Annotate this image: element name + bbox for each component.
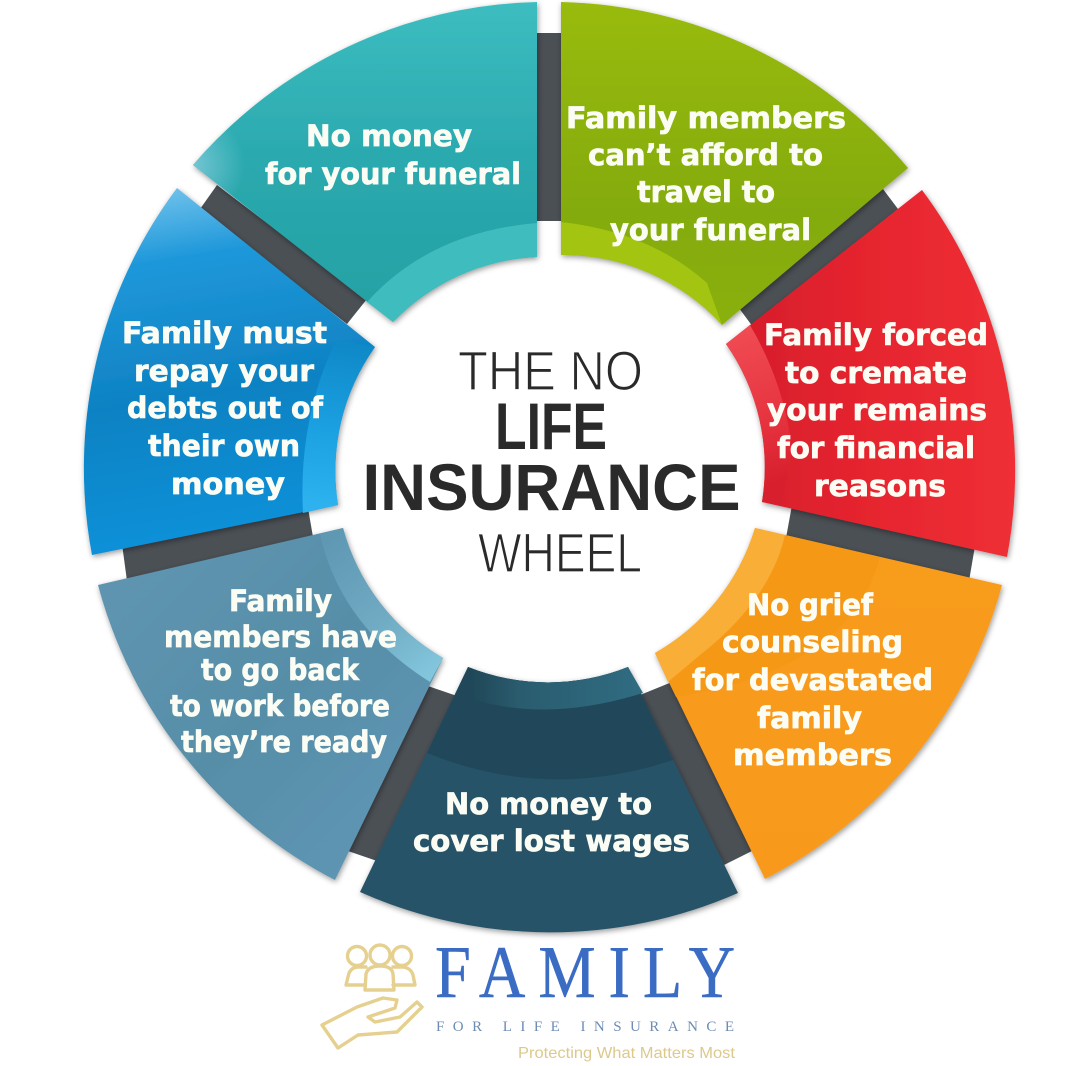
segment: family can't afford to travel: your funeral [610,213,811,247]
segment: repay debts [84,188,375,555]
center title [362,339,740,584]
segment: repay debts: repay your [134,354,315,388]
segment: forced to cremate: to cremate [785,356,967,390]
gray connectors between segments [122,33,975,866]
segment: repay debts: money [171,467,285,501]
segment: repay debts: debts out of [127,391,323,425]
segment: back to work before ready: they’re ready [181,725,387,759]
logo icon: family in hand [322,945,422,1048]
segment: no grief counseling: counseling [722,625,903,659]
segment: back to work before ready: Family [229,584,332,618]
segment: no money for your funeral: No money [306,119,472,153]
segment: no money for your funeral [193,2,537,322]
center title: THE NO [458,339,643,402]
segment: repay debts: Family must [122,316,327,350]
segment: back to work before ready: to work before [170,689,390,723]
segment: no grief counseling [655,528,1002,879]
segment: repay debts: their own [148,429,300,463]
logo subtitle: for life insurance: FOR LIFE INSURANCE [436,1019,734,1035]
segment: forced to cremate: Family forced [764,318,988,352]
center title: LIFE [495,389,607,463]
segment: no grief counseling: family [757,701,862,735]
logo wordmark: family: FAMILY [435,932,735,1014]
segment: back to work before ready: members have [164,620,397,654]
segment: family can't afford to travel: travel to [637,175,775,209]
segment: forced to cremate: reasons [814,469,946,503]
segment: no money to cover lost wages: No money to [445,787,652,821]
segment: back to work before ready [98,528,443,880]
segment: forced to cremate: for financial [777,431,975,465]
segment: no grief counseling: members [733,738,892,772]
logo tagline: Protecting What Matters Most [518,1045,736,1062]
segment: no money to cover lost wages [360,667,738,932]
segment: family can't afford to travel: can’t afford to [588,138,823,172]
segment: family can't afford to travel: Family members [566,101,846,135]
segment: no grief counseling: for devastated [692,663,933,697]
segment: no grief counseling: No grief [747,588,873,622]
segment: family can't afford to travel [561,2,908,325]
segment: no money to cover lost wages: cover lost wages [413,824,690,858]
segment: no money for your funeral: for your funeral [265,157,521,191]
segment: forced to cremate: your remains [767,393,987,427]
segment: back to work before ready: to go back [201,653,360,687]
center title: WHEEL [478,521,642,584]
center title: INSURANCE [362,450,740,524]
segment: forced to cremate [726,190,1015,557]
